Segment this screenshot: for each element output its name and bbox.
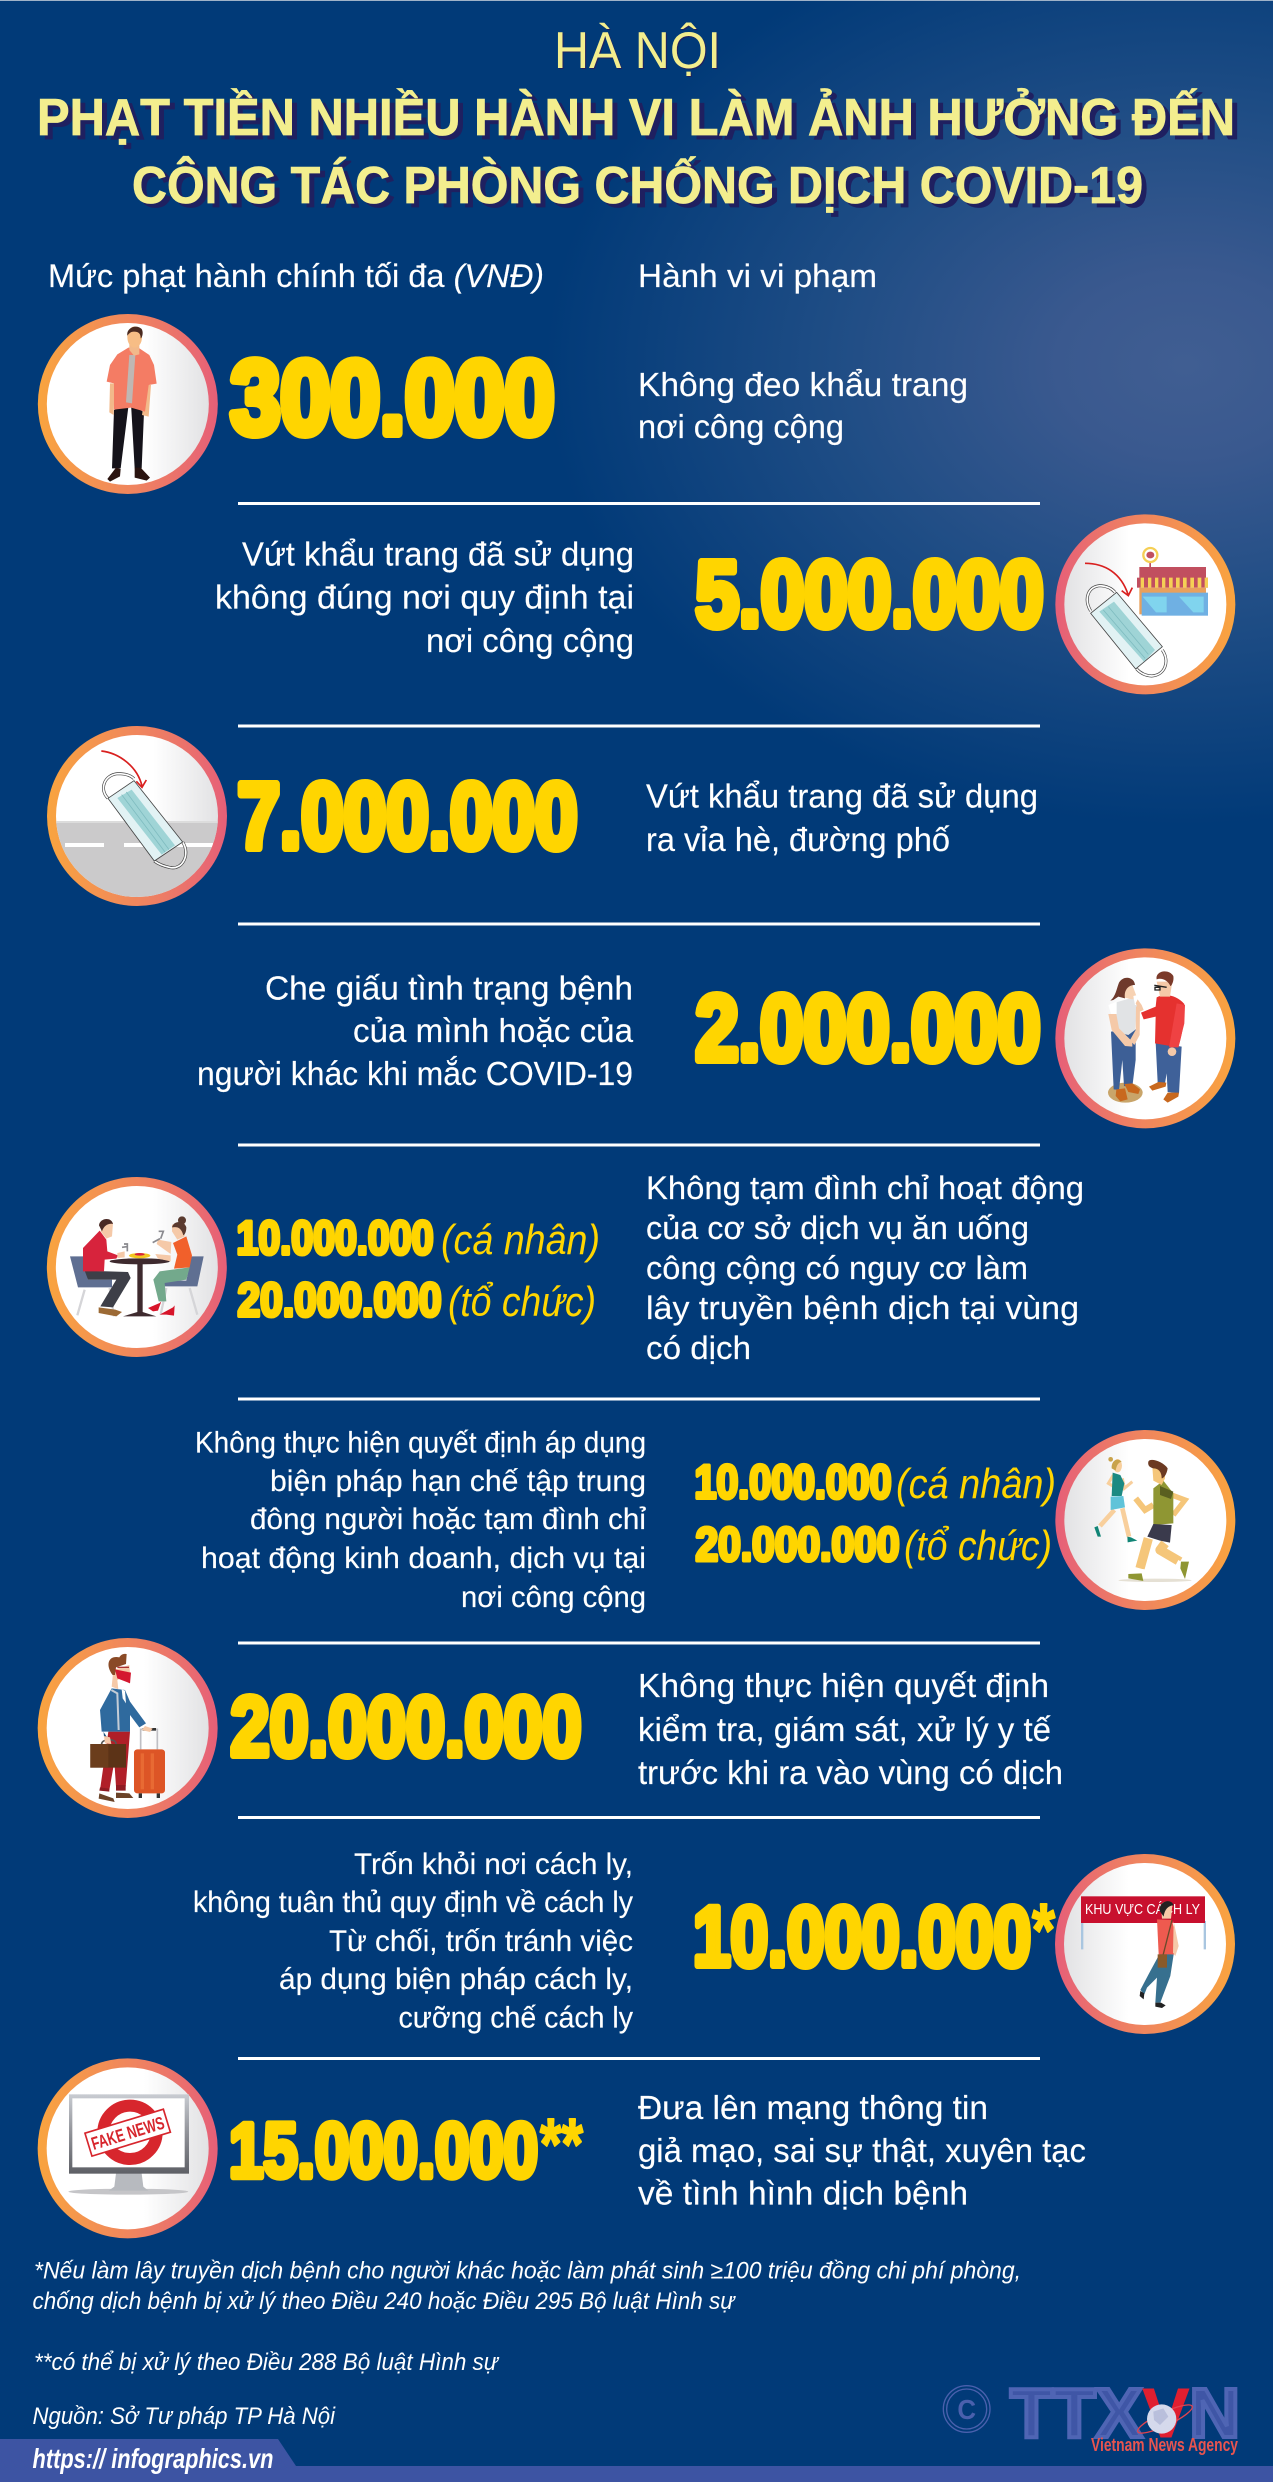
panel: row 6 gathering restrictions — [195, 1426, 1235, 1614]
violation text: Không đeo khẩu trang — [638, 366, 968, 403]
amount: 5.000.000: 5.000.000 — [696, 542, 1044, 646]
violation text: có dịch — [646, 1330, 751, 1366]
logo: wordmark: TTXVN — [1010, 2374, 1240, 2452]
violation text: kiểm tra, giám sát, xử lý y tế — [638, 1711, 1051, 1748]
amounts: individual and organization: 20.000.000 — [238, 1273, 442, 1326]
icon: couple talking — [1055, 948, 1235, 1128]
logo: globe — [1135, 2400, 1195, 2438]
violation text: Che giấu tình trạng bệnh — [265, 970, 633, 1006]
panel: row 4 concealing illness — [197, 948, 1235, 1128]
violation text: Không tạm đình chỉ hoạt động — [646, 1170, 1084, 1206]
violation text — [646, 1170, 1084, 1366]
violation text: của cơ sở dịch vụ ăn uống — [646, 1210, 1029, 1246]
amount: 10.000.000 with footnote mark: 10.000.000 — [693, 1890, 1031, 1984]
title: city: HÀ NỘI — [554, 22, 721, 80]
violation text — [646, 778, 1038, 858]
title: main heading — [37, 88, 1235, 215]
violation text: của mình hoặc của — [353, 1012, 634, 1049]
title block — [37, 22, 1235, 215]
amount: 300.000: 300.000 — [230, 340, 554, 456]
amounts: individual and organization — [236, 1211, 600, 1326]
violation text: biện pháp hạn chế tập trung — [270, 1465, 646, 1498]
violation text: Từ chối, trốn tránh việc — [329, 1925, 633, 1958]
heading: violation: Hành vi vi phạm — [638, 258, 877, 294]
panel: row 9 fake news — [38, 2058, 1086, 2238]
violation text — [638, 2089, 1086, 2212]
violation text — [197, 970, 634, 1092]
footer bar — [0, 2439, 1273, 2482]
icon: mask and shop — [1055, 514, 1235, 694]
violation text: cưỡng chế cách ly — [398, 2002, 633, 2034]
panel: row 1 no mask — [38, 314, 968, 494]
violation text: ra vỉa hè, đường phố — [646, 821, 950, 858]
violation text — [638, 366, 968, 445]
violation text — [193, 1848, 633, 2034]
violation text: người khác khi mắc COVID-19 — [197, 1055, 633, 1092]
amounts: individual and organization: (cá nhân) — [441, 1216, 600, 1263]
violation text: nơi công cộng — [461, 1581, 646, 1614]
violation text: Vứt khẩu trang đã sử dụng — [646, 778, 1038, 814]
amount: 2.000.000: 2.000.000 — [696, 976, 1040, 1080]
amount: 20.000.000: 20.000.000 — [230, 1680, 582, 1774]
panel: row 5 dining services — [47, 1170, 1084, 1366]
violation text: áp dụng biện pháp cách ly, — [279, 1963, 633, 1996]
amounts: individual and organization: 10.000.000 — [694, 1455, 892, 1508]
amounts: individual and organization: 10.000.000 — [236, 1211, 434, 1264]
heading: fine amount: Mức phạt hành chính tối đa (VNĐ) — [48, 258, 544, 294]
violation text: hoạt động kinh doanh, dịch vụ tại — [201, 1542, 646, 1575]
footnotes — [32, 2258, 1021, 2376]
violation text: về tình hình dịch bệnh — [638, 2174, 968, 2212]
panel: row 2 mask littered in public — [215, 514, 1235, 694]
amounts: individual and organization: (tổ chức) — [904, 1522, 1052, 1569]
violation text: Không thực hiện quyết định — [638, 1667, 1049, 1704]
amounts: individual and organization: (tổ chức) — [448, 1278, 596, 1325]
icon: quarantine zone: KHU VỰC CÁCH LY — [1085, 1901, 1200, 1918]
violation text: Trốn khỏi nơi cách ly, — [354, 1848, 633, 1881]
icon: traveler with suitcase — [38, 1638, 218, 1818]
icon: fake news monitor — [38, 2058, 218, 2238]
panel: row 3 mask on street — [47, 726, 1038, 906]
amount: 7.000.000: 7.000.000 — [238, 764, 578, 868]
background glow — [0, 0, 1273, 1000]
icon: man without mask — [38, 314, 218, 494]
violation text: Không thực hiện quyết định áp dụng — [195, 1426, 646, 1460]
logo: copyright mark — [943, 2386, 990, 2432]
violation text: không đúng nơi quy định tại — [215, 578, 634, 616]
violation text: nơi công cộng — [638, 408, 844, 445]
icon: mask on road — [47, 726, 227, 906]
amounts: individual and organization: 20.000.000 — [696, 1518, 900, 1570]
violation text: trước khi ra vào vùng có dịch — [638, 1754, 1063, 1791]
violation text — [215, 536, 634, 659]
violation text: giả mạo, sai sự thật, xuyên tạc — [638, 2132, 1086, 2169]
violation text: nơi công cộng — [426, 622, 634, 659]
logo: TTXVN — [943, 2374, 1240, 2455]
title: main heading: CÔNG TÁC PHÒNG CHỐNG DỊCH COVID-19 — [132, 156, 1143, 215]
website url: https:// infographics.vn — [32, 2443, 274, 2474]
violation text: đông người hoặc tạm đình chỉ — [250, 1503, 646, 1536]
icon: joggers — [1055, 1430, 1235, 1610]
violation text: không tuân thủ quy định về cách ly — [193, 1886, 633, 1919]
icon: couple dining — [47, 1177, 227, 1357]
violation text: Đưa lên mạng thông tin — [638, 2089, 988, 2126]
footnotes: **có thể bị xử lý theo Điều 288 Bộ luật Hình sự — [34, 2349, 500, 2376]
violation text: công cộng có nguy cơ làm — [646, 1250, 1028, 1286]
footnotes: *Nếu làm lây truyền dịch bệnh cho người khác hoặc làm phát sinh ≥100 triệu đồng chi phí phòng, — [34, 2258, 1021, 2284]
violation text: Vứt khẩu trang đã sử dụng — [242, 536, 634, 572]
source: Nguồn: Sở Tư pháp TP Hà Nội — [32, 2403, 336, 2430]
icon: fake news monitor: FAKE NEWS — [89, 2113, 167, 2154]
amounts: individual and organization: (cá nhân) — [896, 1460, 1056, 1507]
amount: 15.000.000 with footnote marks: 15.000.000 — [229, 2108, 538, 2194]
panel: row 8 quarantine evasion — [193, 1848, 1235, 2034]
violation text: lây truyền bệnh dịch tại vùng — [646, 1290, 1079, 1326]
violation text — [195, 1426, 646, 1614]
amounts: individual and organization — [694, 1455, 1056, 1570]
violation text — [638, 1667, 1063, 1791]
amount: 15.000.000 with footnote marks: ** — [540, 2105, 583, 2185]
icon: quarantine zone — [1055, 1854, 1235, 2034]
amount: 10.000.000 with footnote mark: * — [1032, 1888, 1056, 1972]
panel: row 7 medical check at epidemic zone — [38, 1638, 1063, 1818]
logo: copyright mark: C — [957, 2394, 976, 2425]
column headings — [48, 258, 877, 294]
footnotes: chống dịch bệnh bị xử lý theo Điều 240 hoặc Điều 295 Bộ luật Hình sự — [32, 2288, 736, 2315]
